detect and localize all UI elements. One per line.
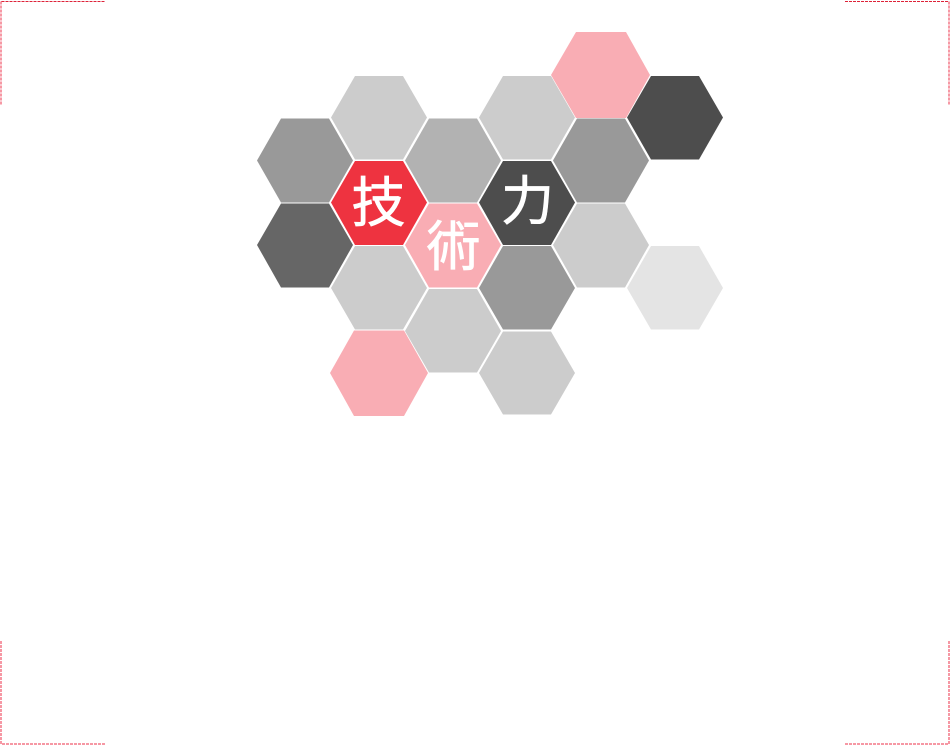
hexagon: light grey lower left bbox=[331, 246, 427, 330]
hexagon: light grey bottom right bbox=[479, 332, 575, 414]
hexagon: light grey centre bottom bbox=[405, 289, 501, 372]
hexagon with character 技: 技 bbox=[352, 174, 406, 234]
hexagon: grey centre top bbox=[405, 118, 501, 202]
crop mark: bottom right bbox=[845, 641, 949, 744]
hexagon: mid grey under 力 bbox=[479, 246, 575, 330]
crop mark: top left bbox=[1, 2, 105, 105]
hexagon: pink top bbox=[551, 32, 650, 118]
hexagon: light grey upper centre bbox=[479, 76, 575, 160]
crop mark: bottom left bbox=[1, 641, 105, 744]
hexagon with character 術 bbox=[405, 204, 501, 288]
hexagon: dark grey top right bbox=[627, 76, 723, 160]
hexagon cluster bbox=[257, 32, 723, 416]
hexagon: light grey top bbox=[331, 76, 427, 160]
hexagon with character 力: 力 bbox=[501, 172, 554, 232]
hexagon: mid grey right bbox=[553, 118, 649, 202]
hexagon with character 力 bbox=[479, 161, 575, 245]
hexagon with character 術: 術 bbox=[426, 218, 480, 278]
hexagon: light grey right bbox=[553, 204, 649, 288]
hexagon: dark grey far left lower bbox=[257, 204, 353, 288]
hexagon with character 技 bbox=[331, 161, 427, 245]
hexagon: mid grey far left upper bbox=[257, 118, 353, 202]
crop mark: top right bbox=[845, 2, 949, 105]
hexagon: pink bottom bbox=[330, 330, 428, 416]
hexagon: pale grey far right bbox=[627, 246, 723, 330]
